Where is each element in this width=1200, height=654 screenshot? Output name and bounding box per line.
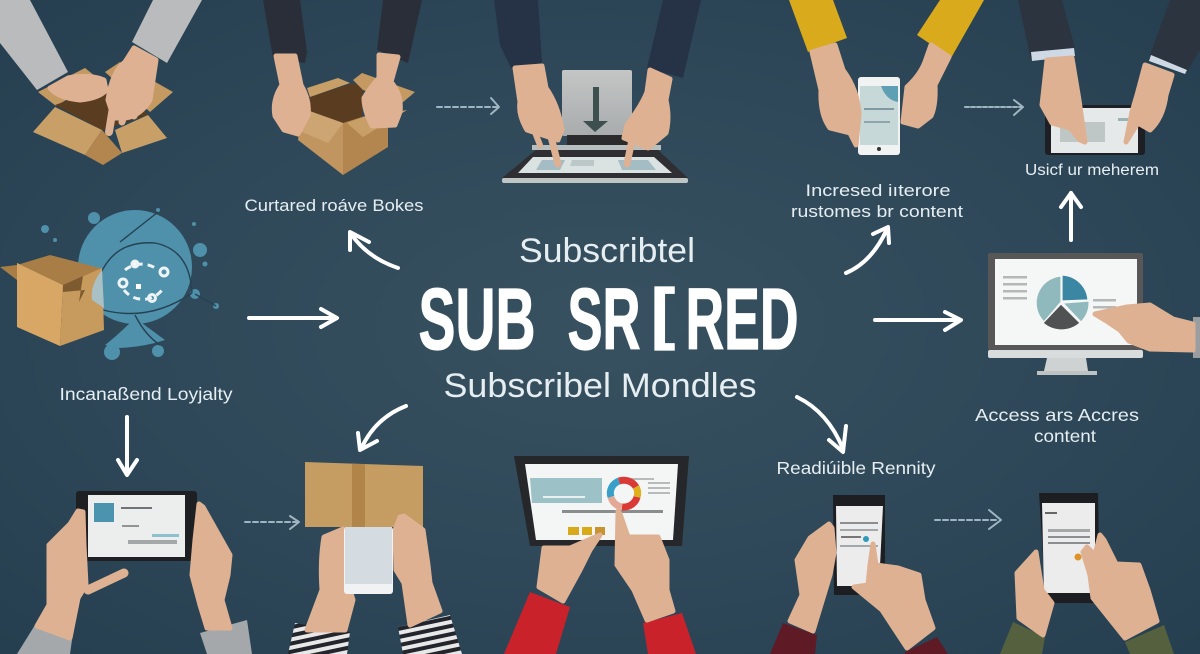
hands <box>50 48 156 132</box>
label: loyalty: Incanaßend Loyjalty <box>60 384 233 404</box>
network lines <box>100 212 216 345</box>
arrow: right to monitor <box>875 312 961 330</box>
thumb over phone <box>402 518 412 545</box>
arrow: dashed to phone <box>935 510 1001 529</box>
pie chart <box>1036 275 1089 330</box>
shirt cuffs <box>1031 48 1187 74</box>
icon: tablet <box>76 491 197 561</box>
icon: open cardboard box <box>33 62 173 165</box>
main title <box>418 271 798 368</box>
hands <box>1042 58 1172 142</box>
hands <box>37 504 230 638</box>
arrow: curved down left <box>358 406 406 450</box>
main title: SUB <box>418 271 536 368</box>
icon: phone <box>858 77 900 155</box>
arrow: dashed to box <box>245 516 299 529</box>
arrow: up to usage <box>1061 193 1081 240</box>
icon: tablet <box>1045 105 1145 155</box>
hands <box>274 55 400 134</box>
panel: phone with yellow sleeves <box>789 0 984 155</box>
arrow: curved down right <box>797 397 846 452</box>
sleeves: striped <box>288 615 462 654</box>
sleeves: dark <box>263 0 422 63</box>
icon: download card <box>562 70 632 136</box>
subtitle bottom: Subscribel Mondles <box>444 367 756 405</box>
arrow: right to center <box>249 309 337 327</box>
panel: phone with maroon sleeves <box>770 495 948 654</box>
label: readable: Readiúible Rennity <box>776 458 936 478</box>
panel: curated box with dark sleeves <box>263 0 422 175</box>
panel: monitor with pie chart <box>988 253 1200 375</box>
panel: laptop download <box>494 0 701 183</box>
icon: flat box <box>305 462 423 527</box>
icon: phone <box>1039 493 1100 603</box>
arrow: curved up right <box>846 227 889 273</box>
icon: phone <box>344 527 393 594</box>
main title: [ <box>651 275 675 351</box>
icon: laptop <box>502 135 688 183</box>
label: curated boxes: Curtared roáve Bokes <box>244 197 424 215</box>
arrow: dashed to laptop <box>437 98 499 114</box>
label: increased interest <box>791 182 963 221</box>
sleeves: maroon <box>770 623 948 654</box>
icon: tablet <box>514 456 689 546</box>
panel: opening box with grey sleeves <box>0 0 202 165</box>
panel: tablet with grey sleeves bottom <box>17 491 252 654</box>
arrow: down to tablet <box>118 417 137 475</box>
sleeves: navy <box>494 0 701 78</box>
icon: cardboard box <box>0 255 104 346</box>
sleeves: grey <box>17 620 252 654</box>
sleeves: yellow <box>789 0 984 58</box>
title block <box>418 232 798 405</box>
hands <box>812 45 949 145</box>
hands <box>790 524 933 648</box>
sleeves: red <box>504 592 696 654</box>
label: usage: Usicf ur meherem <box>1025 162 1159 179</box>
arrow: dashed to tablet <box>965 100 1023 115</box>
panel: box and phone with striped sleeves <box>288 462 462 654</box>
label: access <box>975 405 1139 446</box>
sleeves: grey <box>0 0 202 90</box>
panel: phone with olive sleeves <box>1000 493 1174 654</box>
icon: cardboard box <box>298 73 415 175</box>
donut chart <box>610 480 638 507</box>
label: increased interest: rustomes br content <box>791 203 963 221</box>
hand pointing <box>1095 305 1200 358</box>
icon: monitor <box>988 253 1143 375</box>
hands <box>539 511 673 620</box>
icon: phone <box>833 495 885 595</box>
sleeves: suit <box>1018 0 1200 72</box>
hands <box>307 516 440 630</box>
label: access: content <box>1034 426 1096 446</box>
panel: loyalty emblem with box <box>0 208 219 360</box>
panel: tablet with red sleeves <box>504 456 696 654</box>
main title: RED <box>686 271 798 368</box>
hands <box>1017 535 1157 638</box>
main title: SR <box>568 271 640 368</box>
icon: teal splash <box>41 208 219 360</box>
icon: white network symbol <box>119 261 168 302</box>
sleeves: olive <box>1000 622 1174 654</box>
label: access: Access ars Accres <box>975 405 1139 425</box>
panel: tablet with suit sleeves <box>1018 0 1200 155</box>
subtitle top: Subscribtel <box>519 232 695 270</box>
pale overlap <box>92 270 104 308</box>
hands <box>515 66 670 164</box>
label: increased interest: Incresed iıterore <box>806 182 950 200</box>
arrow: curved up left <box>350 232 398 268</box>
